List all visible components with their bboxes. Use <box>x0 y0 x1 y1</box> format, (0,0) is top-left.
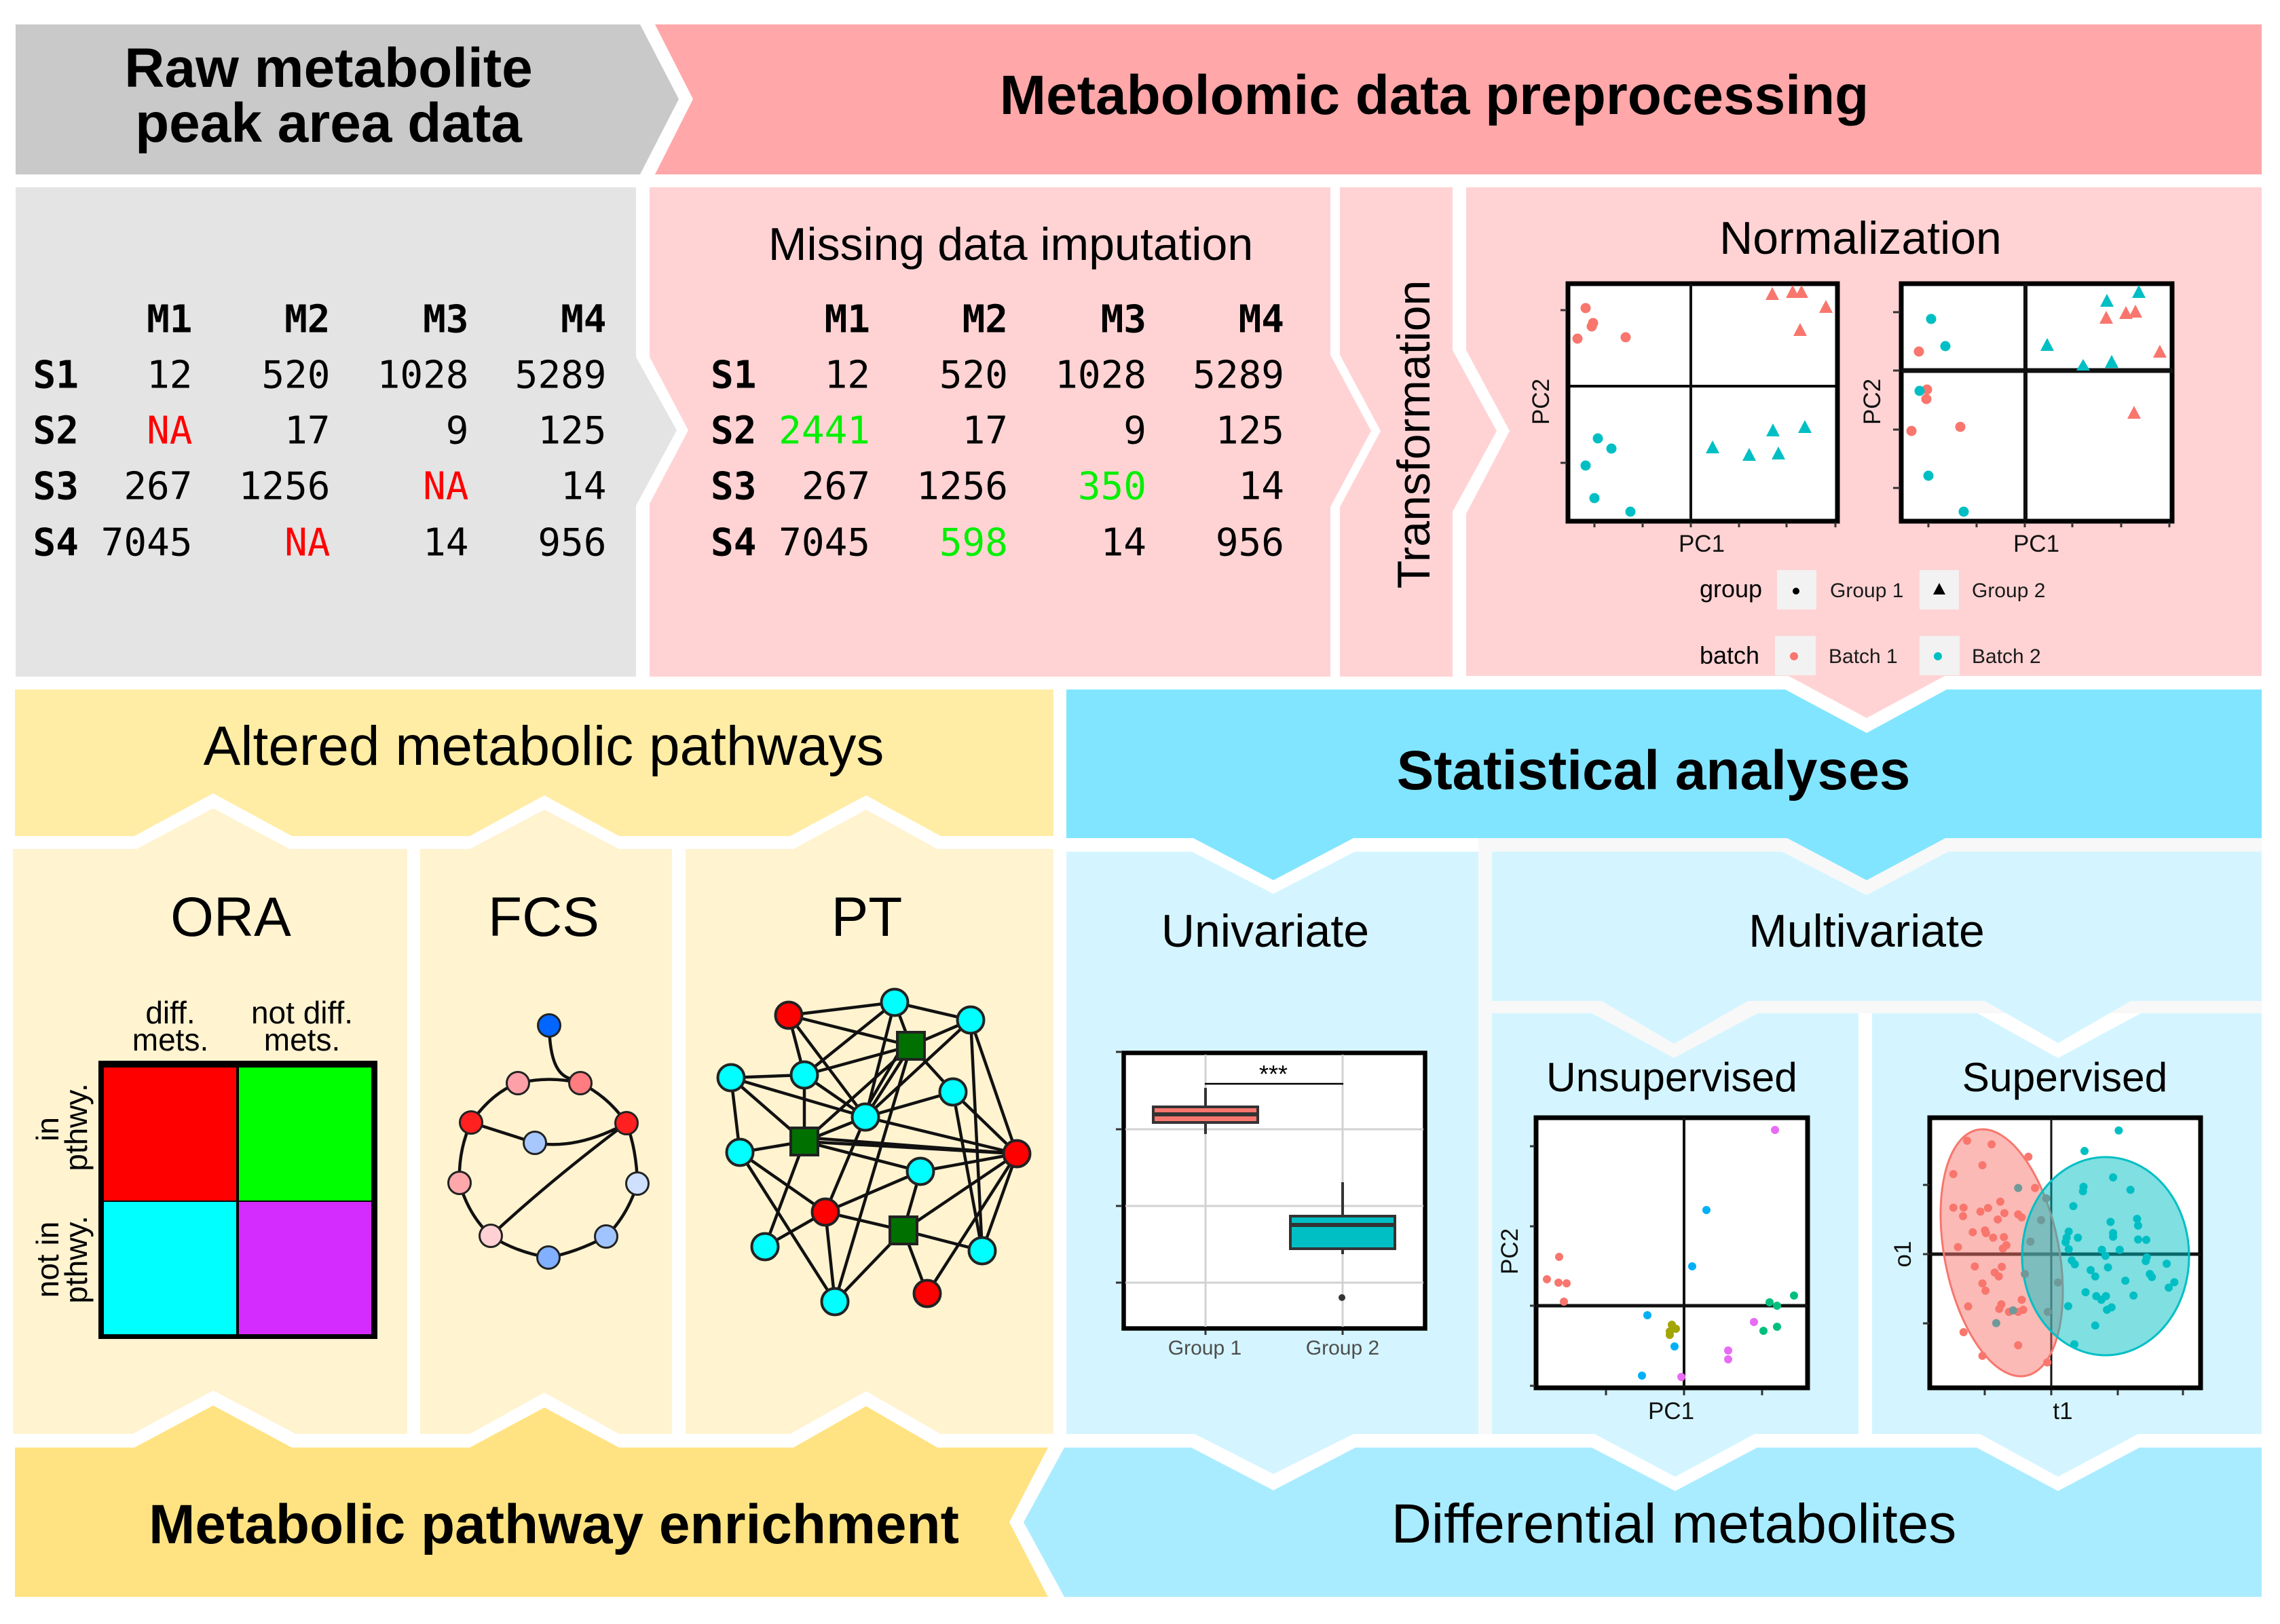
table: raw peak areas: S1 <box>33 353 79 398</box>
table: raw peak areas: 12 <box>147 353 193 398</box>
contingency matrix: mets. <box>132 1022 208 1057</box>
table: raw peak areas: 9 <box>446 409 468 453</box>
table: raw peak areas: 956 <box>538 521 607 565</box>
table: imputed peak areas: 14 <box>1101 521 1146 565</box>
table: imputed peak areas: 956 <box>1216 521 1284 565</box>
table: imputed peak areas: 12 <box>825 353 870 398</box>
table: raw peak areas: M1 <box>147 297 193 342</box>
legend: group and batch: Batch 1 <box>1829 645 1898 668</box>
panel: missing data imputation <box>650 187 1371 677</box>
table: raw peak areas: 267 <box>124 464 193 509</box>
header: raw metabolite peak area data <box>16 24 679 174</box>
table: imputed peak areas: 17 <box>963 409 1008 453</box>
table: imputed peak areas: 1256 <box>916 464 1008 509</box>
table: raw peak areas: 17 <box>284 409 330 453</box>
contingency matrix: not diff. <box>251 995 353 1030</box>
table: imputed peak areas: 125 <box>1216 409 1284 453</box>
scatter plot: after normalization <box>1859 284 2173 557</box>
table: imputed peak areas: 350 <box>1078 464 1146 509</box>
PCA score plot <box>1497 1118 1808 1424</box>
panel: multivariate <box>1492 852 2262 1044</box>
panel: PT <box>686 810 1053 1434</box>
header: raw metabolite peak area data: Raw metabolite <box>124 37 533 99</box>
panel: ORA <box>13 808 407 1434</box>
PCA score plot: PC1 <box>1648 1398 1694 1424</box>
contingency matrix <box>30 995 377 1339</box>
OPLS-DA score plot <box>1890 1118 2201 1424</box>
table: imputed peak areas: S3 <box>711 464 756 509</box>
scatter plot: before normalization: PC1 <box>1679 531 1725 557</box>
table: imputed peak areas: 267 <box>802 464 870 509</box>
banner: metabolic pathway enrichment <box>15 1405 1048 1597</box>
boxplot: group comparison: Group 2 <box>1306 1337 1379 1359</box>
panel: raw data table <box>16 187 677 677</box>
legend: group and batch: batch <box>1700 641 1759 669</box>
table: raw peak areas: S2 <box>33 409 79 453</box>
scatter plot: after normalization: PC2 <box>1859 379 1886 425</box>
table: raw peak areas: 7045 <box>101 521 193 565</box>
panel: FCS <box>420 810 672 1434</box>
boxplot: group comparison: Group 1 <box>1168 1337 1241 1359</box>
table: raw peak areas: M2 <box>284 297 330 342</box>
table: imputed peak areas: 14 <box>1239 464 1284 509</box>
panel: transformation: Transformation <box>1388 280 1440 588</box>
banner: statistical analyses: Statistical analyses <box>1397 740 1910 801</box>
heading: univariate: Univariate <box>1161 905 1369 957</box>
table: imputed peak areas: 9 <box>1123 409 1146 453</box>
table: raw peak areas: 125 <box>538 409 607 453</box>
header: metabolomic data preprocessing <box>655 24 2262 174</box>
network: ranked metabolites <box>448 1014 649 1269</box>
contingency matrix: diff. <box>145 995 195 1030</box>
contingency matrix: pthwy. <box>58 1083 94 1171</box>
network: pathway topology <box>718 989 1030 1315</box>
heading: missing data imputation: Missing data imputation <box>768 219 1253 270</box>
table: imputed peak areas: M2 <box>963 297 1008 342</box>
PCA score plot: PC2 <box>1497 1228 1523 1274</box>
table: imputed peak areas: 520 <box>939 353 1008 398</box>
table: raw peak areas: 14 <box>561 464 607 509</box>
panel: transformation <box>1340 187 1497 677</box>
table: raw peak areas: NA <box>284 521 330 565</box>
heading: ORA: ORA <box>170 886 291 948</box>
table: imputed peak areas: M3 <box>1101 297 1146 342</box>
header: raw metabolite peak area data: peak area data <box>135 92 523 154</box>
banner: altered metabolic pathways: Altered metabolic pathways <box>204 715 884 777</box>
legend: group and batch: Group 1 <box>1830 580 1903 602</box>
table: imputed peak areas: M1 <box>825 297 870 342</box>
table: raw peak areas: M3 <box>423 297 468 342</box>
table: raw peak areas: 14 <box>423 521 468 565</box>
legend: group and batch: group <box>1700 575 1762 603</box>
OPLS-DA score plot: o1 <box>1890 1241 1916 1267</box>
table: raw peak areas: S3 <box>33 464 79 509</box>
contingency matrix: not in <box>30 1222 65 1298</box>
banner: altered metabolic pathways <box>15 690 1053 836</box>
panel: univariate <box>1066 852 1478 1474</box>
panel: normalization <box>1466 187 2262 718</box>
table: imputed peak areas: S2 <box>711 409 756 453</box>
boxplot: group comparison <box>1116 1052 1425 1359</box>
table: imputed peak areas: 2441 <box>779 409 870 453</box>
scatter plot: after normalization: PC1 <box>2013 531 2059 557</box>
boxplot: group comparison: *** <box>1259 1060 1288 1088</box>
scatter plot: before normalization <box>1528 284 1838 557</box>
table: raw peak areas: M4 <box>561 297 607 342</box>
contingency matrix: in <box>30 1117 65 1141</box>
header: metabolomic data preprocessing: Metabolomic data preprocessing <box>1000 64 1869 126</box>
heading: normalization: Normalization <box>1719 212 2002 264</box>
table: imputed peak areas: 598 <box>939 521 1008 565</box>
table: imputed peak areas: S1 <box>711 353 756 398</box>
table: imputed peak areas: 1028 <box>1055 353 1146 398</box>
table: imputed peak areas: 5289 <box>1193 353 1284 398</box>
heading: unsupervised: Unsupervised <box>1546 1054 1797 1100</box>
banner: metabolic pathway enrichment: Metabolic pathway enrichment <box>149 1494 959 1555</box>
heading: FCS: FCS <box>488 886 599 948</box>
panel: supervised <box>1872 1013 2262 1477</box>
table: raw peak areas: 520 <box>261 353 330 398</box>
banner: differential metabolites: Differential metabolites <box>1391 1493 1956 1555</box>
legend: group and batch <box>1700 570 2045 675</box>
OPLS-DA score plot: t1 <box>2053 1398 2073 1424</box>
contingency matrix: pthwy. <box>58 1215 94 1304</box>
scatter plot: before normalization: PC2 <box>1528 379 1554 425</box>
panel: unsupervised <box>1492 1013 1858 1477</box>
panel: multivariate: Multivariate <box>1749 905 1985 957</box>
table: raw peak areas: S4 <box>33 521 79 565</box>
table: raw peak areas <box>33 297 607 565</box>
table: imputed peak areas: 7045 <box>779 521 870 565</box>
table: imputed peak areas: M4 <box>1239 297 1284 342</box>
table: raw peak areas: NA <box>147 409 193 453</box>
legend: group and batch: Group 2 <box>1972 580 2045 602</box>
table: raw peak areas: 1028 <box>377 353 468 398</box>
table: imputed peak areas <box>711 297 1284 565</box>
table: raw peak areas: 1256 <box>239 464 330 509</box>
heading: supervised: Supervised <box>1962 1054 2167 1100</box>
table: imputed peak areas: S4 <box>711 521 756 565</box>
banner: differential metabolites <box>1024 1448 2262 1597</box>
table: raw peak areas: NA <box>423 464 468 509</box>
banner: statistical analyses <box>1066 690 2262 880</box>
contingency matrix: mets. <box>264 1022 340 1057</box>
heading: PT: PT <box>831 886 902 948</box>
table: raw peak areas: 5289 <box>515 353 607 398</box>
legend: group and batch: Batch 2 <box>1972 645 2041 668</box>
